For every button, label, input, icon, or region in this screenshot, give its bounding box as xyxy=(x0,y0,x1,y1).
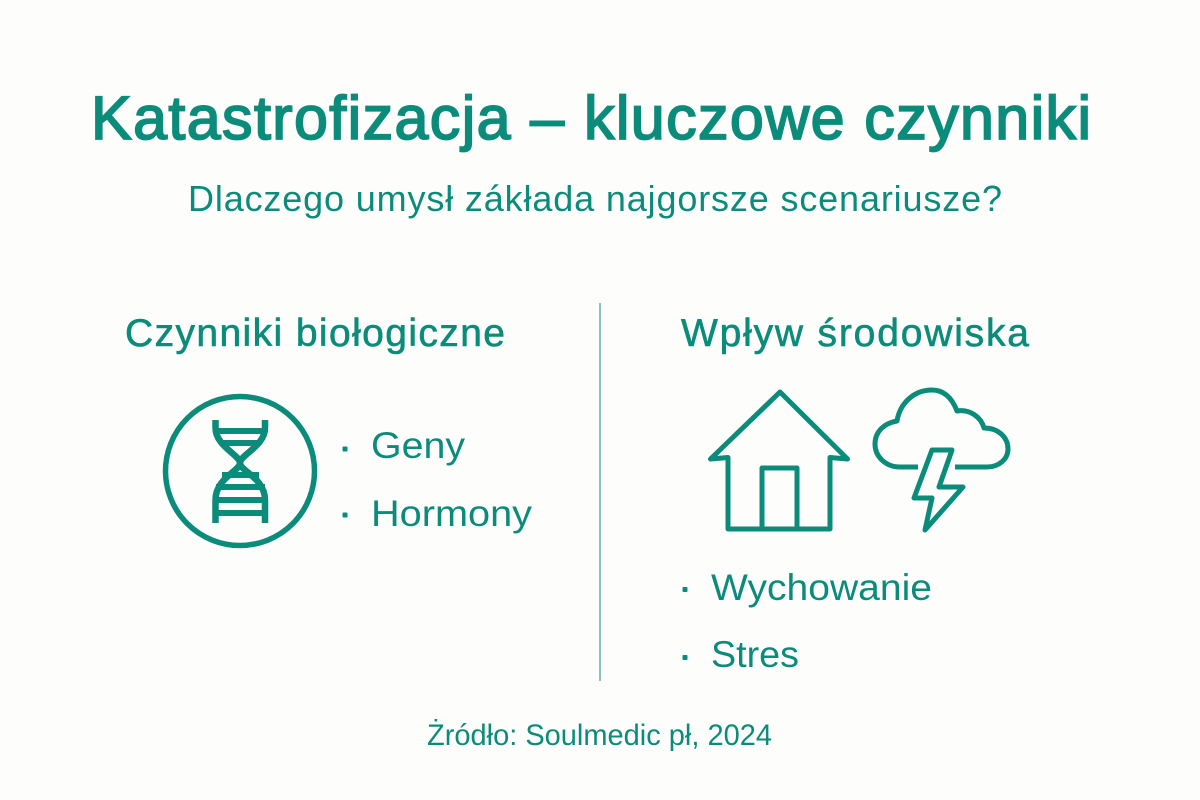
heading: biological factors: Czynniki biołogiczne xyxy=(125,312,505,355)
subtitle: Dlaczego umysł zákłada najgorsze scenariusze? xyxy=(188,178,1002,219)
panel: environmental influence xyxy=(681,312,1029,675)
title: Katastrofizacja – kluczowe czynniki xyxy=(91,84,1091,152)
heading: environmental influence: Wpływ środowiska xyxy=(681,312,1029,355)
icon: storm cloud with lightning xyxy=(875,390,1008,530)
bullet list: environmental: Stres xyxy=(711,634,799,675)
icon: DNA in circle xyxy=(166,396,314,546)
bullet list: biological: Hormony xyxy=(371,493,533,534)
panel: biological factors xyxy=(125,312,533,546)
bullet list: environmental: Wychowanie xyxy=(711,567,932,608)
bullet list: biological: Geny xyxy=(371,425,466,466)
source note: Żródło: Soulmedic pł, 2024 xyxy=(427,719,772,752)
icon: house xyxy=(710,392,848,529)
bullet list: biological xyxy=(342,425,533,534)
bullet list: environmental xyxy=(682,567,932,675)
